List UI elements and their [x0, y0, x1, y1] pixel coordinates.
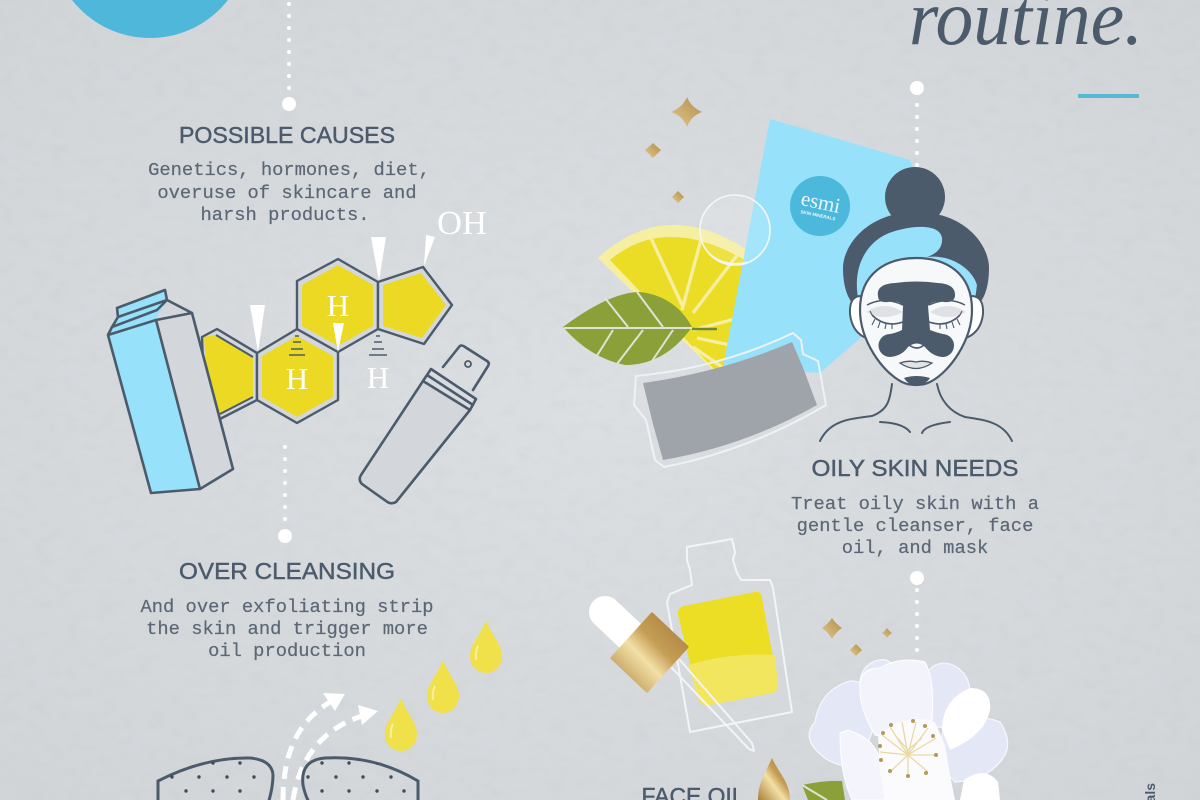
hexagon ring upper — [297, 259, 378, 352]
pentagon ring — [378, 267, 452, 344]
top-left blue circle — [51, 0, 249, 38]
icon: face with mask — [820, 167, 1012, 441]
anthers — [878, 719, 938, 778]
headband — [857, 227, 977, 300]
label OH: OH — [437, 205, 487, 242]
text: possible causes: Genetics, hormones, diet, — [148, 159, 430, 181]
text: over cleansing: oil production — [208, 640, 366, 662]
icon: flower — [809, 660, 1008, 800]
mouth and nose — [900, 345, 932, 368]
label H outside: H — [367, 360, 389, 395]
t-zone mask — [878, 282, 955, 357]
chin mask — [904, 376, 930, 385]
text: over cleansing: And over exfoliating strip — [140, 596, 434, 618]
section: over cleansing — [140, 558, 434, 662]
left ear — [850, 296, 866, 338]
hash bonds — [289, 336, 387, 355]
label H upper: H — [327, 288, 349, 323]
icon: milk carton — [108, 290, 233, 493]
neck and shoulders — [820, 384, 1012, 441]
text: oily skin needs: gentle cleanser, face — [797, 515, 1033, 537]
molecule diagram — [202, 205, 487, 423]
back petals — [809, 660, 1008, 782]
heading: over cleansing: OVER CLEANSING — [179, 558, 395, 584]
icon: oil bottle — [667, 539, 792, 751]
text: possible causes: overuse of skincare and — [157, 182, 417, 204]
icon: gold drop — [758, 758, 790, 800]
text: oily skin needs: oil, and mask — [842, 537, 988, 559]
icon: esmi logo: SKIN MINERALS — [800, 209, 836, 221]
hair bun — [885, 167, 945, 227]
accent rule — [1078, 94, 1139, 98]
right ear — [966, 296, 983, 338]
dotted connector: middle right — [910, 571, 924, 652]
sparkles top — [645, 97, 702, 203]
heading: oily skin needs: OILY SKIN NEEDS — [812, 455, 1018, 481]
section: oily skin needs — [791, 455, 1039, 559]
stamens — [880, 722, 938, 776]
icon: bubble — [700, 195, 770, 265]
sparkles lower — [822, 618, 892, 656]
wedge bonds — [250, 235, 435, 352]
icon: lower leaf — [802, 781, 845, 800]
dotted connector: top left — [282, 4, 296, 111]
eyes — [866, 300, 966, 329]
icon: esmi logo — [784, 170, 856, 242]
icon: lemon wedge — [598, 225, 747, 372]
icon: skin pores right — [303, 758, 418, 800]
icon: gray jar — [634, 333, 826, 467]
arrows: dashed — [283, 693, 378, 800]
icon: dropper — [605, 612, 687, 691]
text: possible causes: harsh products. — [200, 204, 370, 226]
dotted connector: top right — [910, 81, 924, 166]
icon: esmi logo: esmi — [799, 186, 843, 218]
left ring — [202, 329, 257, 420]
face — [860, 258, 972, 385]
heading: possible causes: POSSIBLE CAUSES — [179, 122, 395, 148]
center white petals — [860, 660, 933, 745]
icon: cleanser tube — [723, 119, 950, 373]
hair — [843, 212, 989, 305]
icon: oil drops — [385, 620, 502, 751]
label H lower: H — [286, 361, 308, 396]
dotted connector: middle left — [278, 447, 292, 543]
text: over cleansing: the skin and trigger more — [146, 618, 428, 640]
section: possible causes — [148, 122, 430, 226]
icon: skin pores left — [158, 758, 273, 800]
icon: leaf — [563, 292, 717, 365]
icon: spray bottle — [360, 346, 489, 503]
text: oily skin needs: Treat oily skin with a — [791, 493, 1039, 515]
hexagon ring lower — [257, 329, 338, 423]
